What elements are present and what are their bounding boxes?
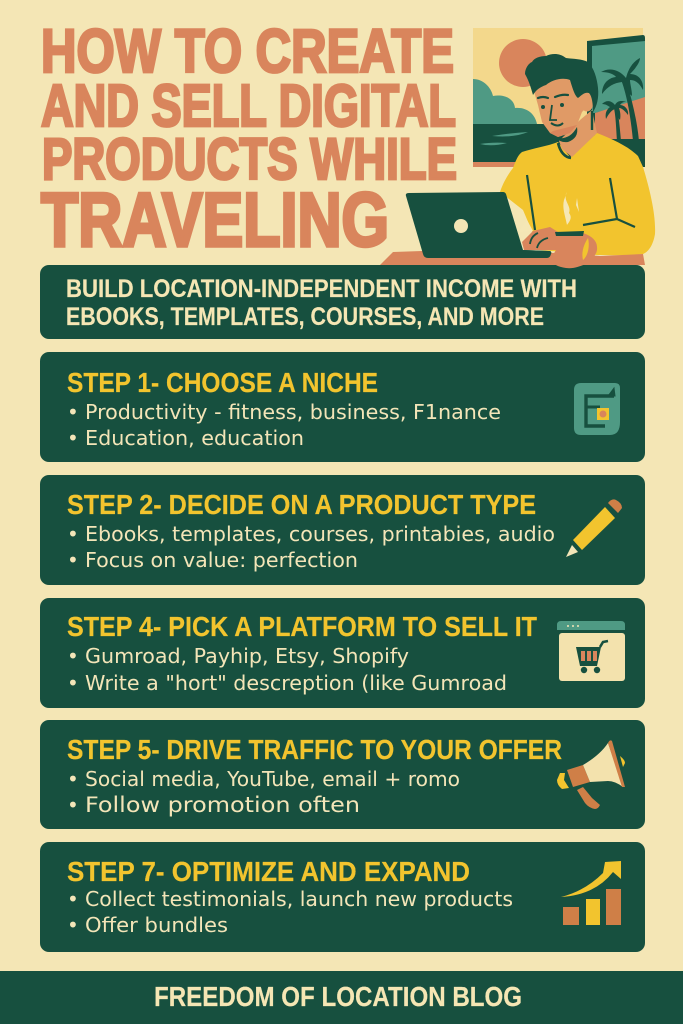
panel: step 4: Gumroad, Payhip, Etsy, Shopify xyxy=(85,644,409,668)
footer banner: FREEDOM OF LOCATION BLOG xyxy=(154,981,522,1012)
table xyxy=(380,251,645,265)
person: head and neck xyxy=(525,54,598,158)
panel: step 1: Productivity - fitness, business, F1nance xyxy=(85,400,501,424)
footer banner xyxy=(0,971,683,1024)
scenery: beach picture xyxy=(473,28,645,167)
title: PRODUCTS WHILE xyxy=(42,127,457,192)
panel: step 2: STEP 2- DECIDE ON A PRODUCT TYPE xyxy=(67,489,536,520)
title xyxy=(41,17,457,263)
panel: step 7 xyxy=(40,842,645,952)
panel: step 4: • xyxy=(67,671,79,695)
subtitle banner: BUILD LOCATION-INDEPENDENT INCOME WITH xyxy=(66,275,577,303)
panel: step 2: • xyxy=(67,522,79,546)
panel: step 4 xyxy=(40,598,645,708)
panel: step 7: STEP 7- OPTIMIZE AND EXPAND xyxy=(67,856,470,887)
sleeve highlight xyxy=(518,220,533,232)
subtitle banner xyxy=(40,265,645,339)
person: sweater xyxy=(500,133,655,255)
panel: step 4: Write a "hort" descreption (like Gumroad xyxy=(85,671,507,695)
person: sweater fold lines xyxy=(527,175,635,230)
laptop xyxy=(406,192,551,258)
panel: step 5: Follow promotion often xyxy=(85,793,360,817)
title: HOW TO CREATE xyxy=(41,17,454,85)
panel: step 5: STEP 5- DRIVE TRAFFIC TO YOUR OFFER xyxy=(67,734,562,765)
title: TRAVELING xyxy=(41,178,389,263)
icon: niche badge xyxy=(574,383,620,435)
panel: step 1: • xyxy=(67,400,79,424)
panel: step 2: Ebooks, templates, courses, printabies, audio xyxy=(85,522,555,546)
title: AND SELL DIGITAL xyxy=(41,73,456,139)
icon: megaphone xyxy=(557,740,625,809)
panel: step 4: • xyxy=(67,644,79,668)
icon: growth chart with arrow xyxy=(561,861,621,925)
panel: step 5: • xyxy=(67,793,79,817)
panel: step 1: • xyxy=(67,426,79,450)
panel: step 1: Education, education xyxy=(85,426,304,450)
panel: step 1: STEP 1- CHOOSE A NICHE xyxy=(67,367,378,398)
panel: step 2: • xyxy=(67,548,79,572)
panel: step 7: • xyxy=(67,913,79,937)
panel: step 7: Collect testimonials, launch new products xyxy=(85,887,513,911)
subtitle banner: EBOOKS, TEMPLATES, COURSES, AND MORE xyxy=(66,303,544,331)
panel: step 2 xyxy=(40,475,645,585)
steam xyxy=(563,192,579,225)
panel: step 2: Focus on value: perfection xyxy=(85,548,358,572)
panel: step 5 xyxy=(40,720,645,829)
panel: step 7: • xyxy=(67,887,79,911)
panel: step 4: STEP 4- PICK A PLATFORM TO SELL IT xyxy=(67,611,537,642)
panel: step 1 xyxy=(40,352,645,462)
hand and coffee mug xyxy=(522,227,597,268)
icon: online store cart xyxy=(557,621,625,681)
icon: pencil xyxy=(566,499,622,557)
panel: step 5: Social media, YouTube, email + romo xyxy=(85,767,460,791)
panel: step 7: Offer bundles xyxy=(85,913,228,937)
illustration: traveler working on a laptop xyxy=(380,28,655,265)
panel: step 5: • xyxy=(67,767,79,791)
